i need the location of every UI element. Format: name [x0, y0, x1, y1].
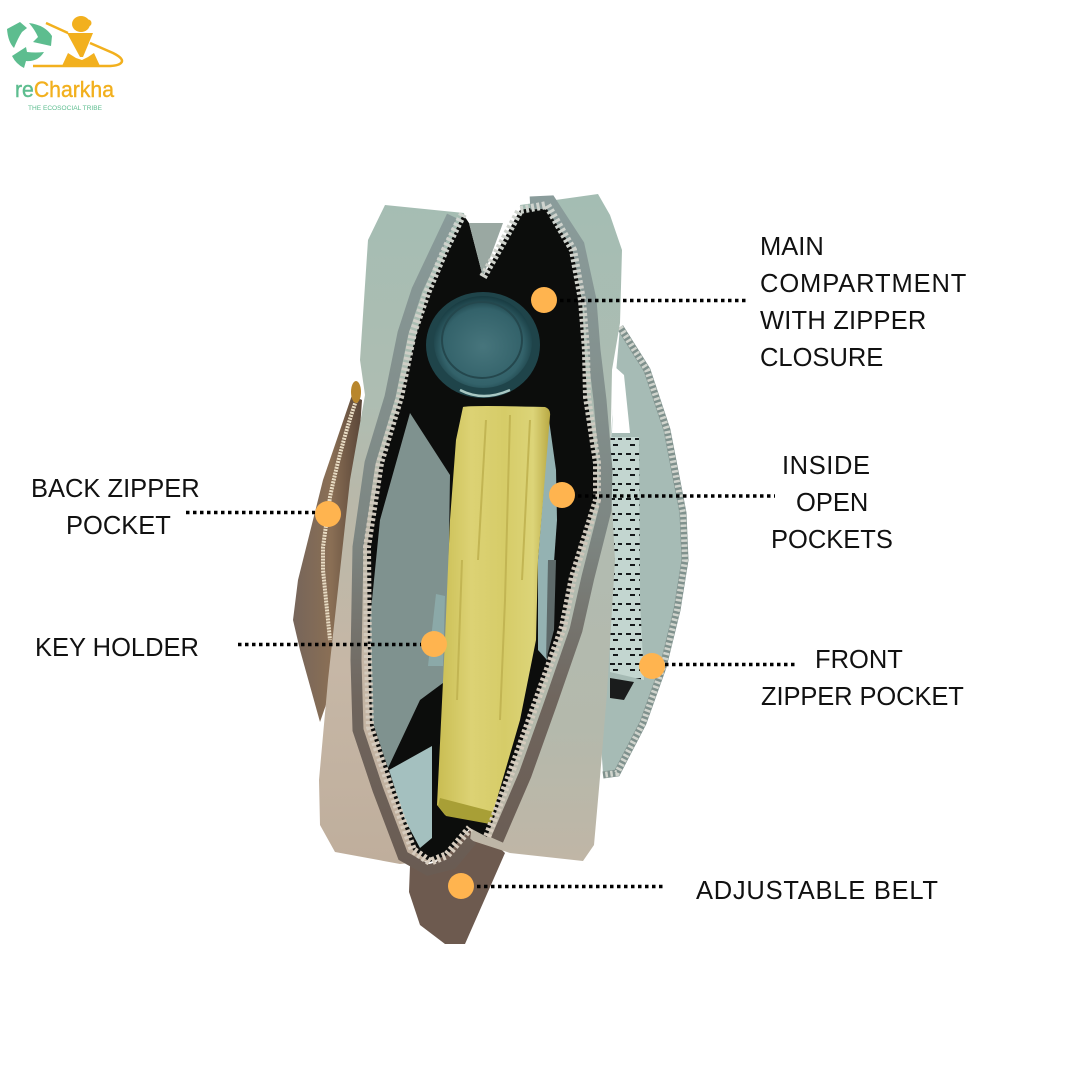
- bag illustration: [293, 194, 685, 944]
- label: ADJUSTABLE BELT: [696, 877, 939, 905]
- marker dot: [448, 873, 474, 899]
- tagline: THE ECOSOCIAL TRIBE: [28, 105, 102, 112]
- label: ZIPPER POCKET: [761, 683, 964, 711]
- label: BACK ZIPPER: [31, 475, 200, 503]
- marker dot: [549, 482, 575, 508]
- leader line: [477, 885, 665, 888]
- marker dot: [639, 653, 665, 679]
- callout: front zipper pocket: [639, 646, 964, 711]
- marker dot: [421, 631, 447, 657]
- label: CLOSURE: [760, 344, 883, 372]
- pale lower pocket: [389, 746, 432, 848]
- label: OPEN: [796, 489, 868, 517]
- leader line: [665, 663, 795, 666]
- leader line: [238, 643, 422, 646]
- marker dot: [531, 287, 557, 313]
- callout: back zipper pocket: [31, 475, 341, 540]
- callout: key holder: [35, 631, 447, 662]
- interior: [367, 205, 597, 862]
- zippers: [356, 202, 606, 870]
- label: INSIDE: [782, 452, 871, 480]
- leader line: [560, 299, 748, 302]
- right zipper: [483, 202, 606, 840]
- label: POCKET: [66, 512, 171, 540]
- label: COMPARTMENT: [760, 270, 967, 298]
- icon: spinner figure: [33, 16, 122, 66]
- left zipper: [356, 214, 472, 870]
- brand name: reCharkha: [15, 77, 115, 102]
- icon: recycle arrows: [7, 22, 52, 68]
- bag body right: [470, 194, 622, 861]
- callout: adjustable belt: [448, 873, 939, 905]
- callout: inside open pockets: [549, 452, 893, 554]
- label: MAIN: [760, 233, 824, 261]
- leader line: [186, 511, 315, 514]
- bag body left: [319, 205, 480, 864]
- leader line: [578, 494, 775, 498]
- label: FRONT: [815, 646, 903, 674]
- back zipper pocket: [293, 381, 362, 722]
- label: KEY HOLDER: [35, 634, 199, 662]
- callout: main compartment: [531, 233, 967, 372]
- inside right pocket: [538, 420, 557, 660]
- key holder strap: [428, 594, 445, 666]
- front zipper pocket: [598, 327, 685, 775]
- label: POCKETS: [771, 526, 893, 554]
- logo: reCharkha: [7, 16, 122, 112]
- label: WITH ZIPPER: [760, 307, 927, 335]
- adjustable belt: [409, 825, 505, 944]
- marker dot: [315, 501, 341, 527]
- inside left pocket: [370, 413, 450, 768]
- bottle cap: [426, 292, 540, 398]
- book: [437, 406, 550, 824]
